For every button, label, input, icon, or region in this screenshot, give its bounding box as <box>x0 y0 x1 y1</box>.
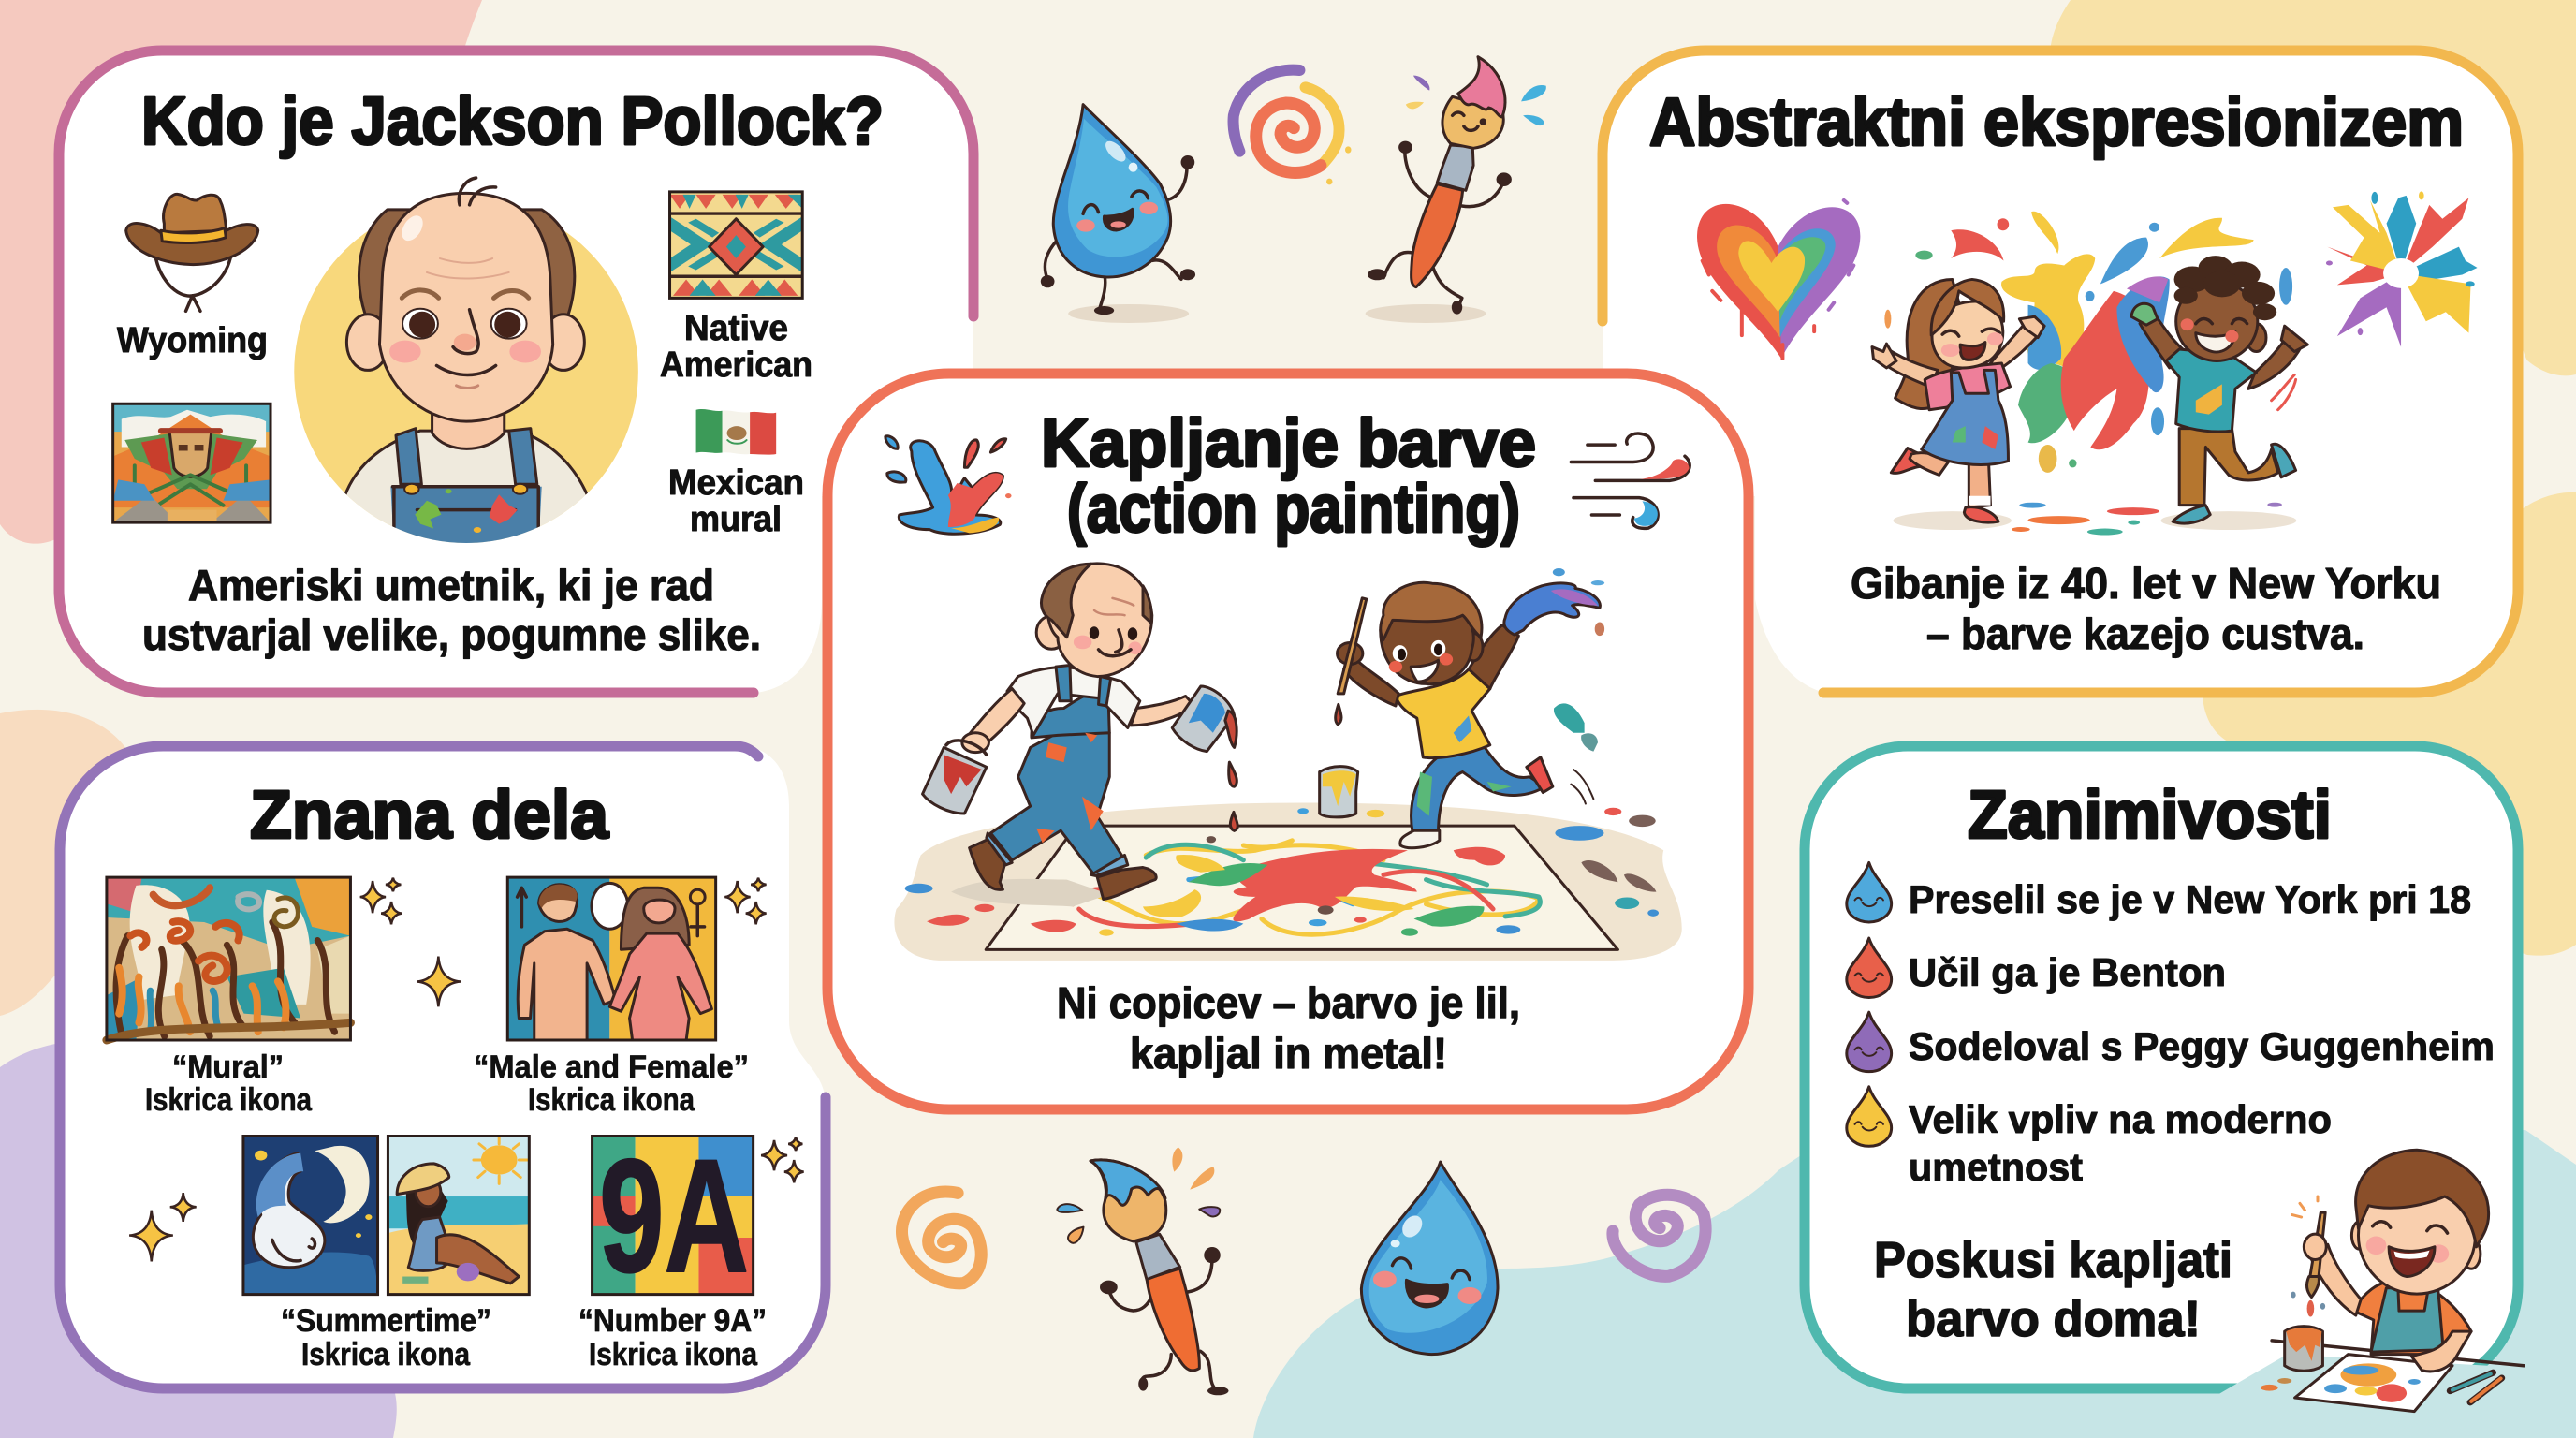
panel: Kdo je Jackson Pollock <box>59 51 973 693</box>
icon: purple drop face <box>1847 1012 1892 1072</box>
decoration: orange spiral <box>901 1192 981 1284</box>
heading: Kdo je Jackson Pollock? <box>141 84 884 159</box>
icon: blue drop face <box>1847 862 1892 922</box>
illustration: child dripping paint <box>2261 1150 2524 1412</box>
label Native American: Native <box>684 309 788 348</box>
painting: Number 9A: 9A <box>599 1126 749 1306</box>
label Native American: American <box>660 345 812 385</box>
heading <box>1041 406 1536 547</box>
call to action <box>1874 1232 2232 1347</box>
mascot: dancing water drop top <box>1041 105 1195 323</box>
painting: Male and Female <box>507 877 716 1040</box>
caption Mural: “Mural” <box>172 1049 284 1085</box>
illustration: Pollock pouring paint <box>923 564 1237 906</box>
icon: wind swirl <box>1571 433 1690 528</box>
description text: – barve kazejo custva. <box>1926 609 2364 658</box>
panel frame teal <box>1805 746 2531 1407</box>
caption Male and Female <box>474 1049 749 1118</box>
fact 4: Velik vpliv na moderno <box>1909 1097 2332 1141</box>
icon: Mexican flag <box>696 409 776 455</box>
panel: Kapljanje barve <box>827 374 1749 1109</box>
description text: Gibanje iz 40. let v New Yorku <box>1851 559 2441 608</box>
label Mexican mural <box>668 463 804 539</box>
sparkle icons <box>129 878 804 1261</box>
heading: Abstraktni ekspresionizem <box>1649 85 2464 160</box>
mascot: dancing paintbrush top <box>1366 57 1546 323</box>
description text: Ameriski umetnik, ki je rad <box>188 561 714 609</box>
painting: Summertime <box>243 1137 529 1295</box>
icon: Native American pattern <box>670 192 802 298</box>
label Native American <box>660 309 812 385</box>
mascot: happy water drop bottom <box>1361 1162 1498 1355</box>
description text <box>1057 978 1520 1078</box>
icon: Mexican mural mini painting <box>113 404 271 522</box>
mascot: dancing paintbrush bottom <box>1057 1147 1228 1395</box>
panel: Abstraktni ekspresionizem <box>1603 51 2518 693</box>
heading: Kapljanje barve <box>1041 406 1536 481</box>
portrait of Jackson Pollock <box>294 178 638 559</box>
painting: Mural <box>107 877 350 1040</box>
caption Summertime: “Summertime” <box>281 1303 491 1339</box>
heading: Zanimivosti <box>1968 778 2332 853</box>
icon: colour burst <box>2326 191 2478 347</box>
label Wyoming: Wyoming <box>117 321 268 360</box>
illustration: children with paint splash <box>1872 212 2307 536</box>
caption Number 9A: “Number 9A” <box>578 1303 767 1339</box>
fact 2: Učil ga je Benton <box>1909 950 2226 994</box>
description text: ustvarjal velike, pogumne slike. <box>142 610 761 659</box>
caption Mural: Iskrica ikona <box>145 1082 313 1118</box>
heading: Znana dela <box>250 778 609 853</box>
illustration: paint floor and canvas <box>894 802 1682 961</box>
description text: kapljal in metal! <box>1130 1029 1447 1078</box>
decoration: purple spiral <box>1613 1195 1705 1276</box>
description text: Ni copicev – barvo je lil, <box>1057 978 1520 1027</box>
icon: paint splash <box>886 436 1012 534</box>
panel frame coral <box>827 374 1749 1109</box>
panel frame purple <box>60 746 826 1388</box>
label Mexican mural: Mexican <box>668 463 804 503</box>
fact 3: Sodeloval s Peggy Guggenheim <box>1909 1024 2495 1068</box>
caption Mural <box>145 1049 313 1118</box>
caption Summertime: Iskrica ikona <box>301 1337 471 1372</box>
fact 4 <box>1909 1097 2332 1189</box>
panel: Znana dela <box>60 746 826 1388</box>
panel: Zanimivosti <box>1805 746 2531 1412</box>
caption Number 9A <box>578 1303 767 1372</box>
icon: yellow drop face <box>1847 1087 1892 1146</box>
description text <box>142 561 761 659</box>
caption Number 9A: Iskrica ikona <box>589 1337 758 1372</box>
decoration: rainbow spiral <box>1234 70 1352 184</box>
description text <box>1851 559 2441 658</box>
caption Male and Female: Iskrica ikona <box>528 1082 695 1118</box>
fact 4: umetnost <box>1909 1145 2083 1189</box>
label Mexican mural: mural <box>690 500 782 539</box>
panel frame yellow <box>1603 51 2518 693</box>
heading: (action painting) <box>1067 472 1520 547</box>
call to action: barvo doma! <box>1906 1291 2201 1347</box>
call to action: Poskusi kapljati <box>1874 1232 2232 1288</box>
icon: red drop face <box>1847 938 1892 998</box>
caption Summertime <box>281 1303 491 1372</box>
icon: rainbow heart <box>1697 200 1860 359</box>
illustration: child with brush <box>1320 568 1604 848</box>
icon: cowboy hat <box>126 194 258 311</box>
caption Male and Female: “Male and Female” <box>474 1049 749 1085</box>
panel frame pink <box>59 51 973 693</box>
fact 1: Preselil se je v New York pri 18 <box>1909 877 2471 921</box>
